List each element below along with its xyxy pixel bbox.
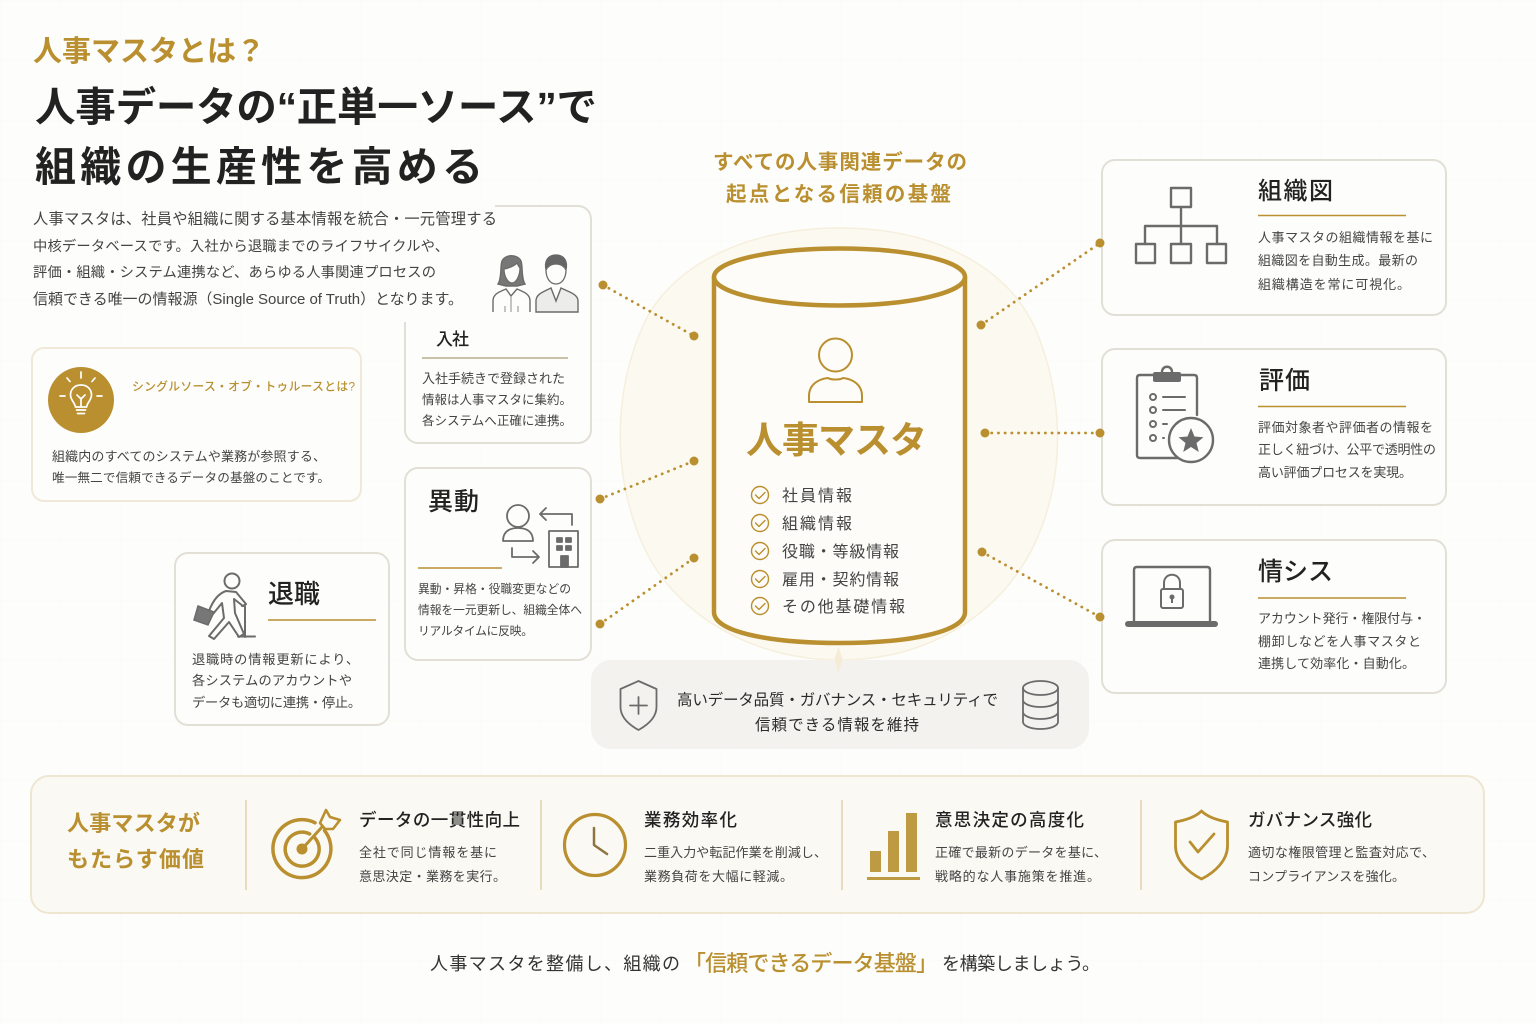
text: 情シス description: アカウント発行・権限付与・ [1258, 611, 1426, 626]
value: governance: コンプライアンスを強化。 [1248, 869, 1405, 884]
heading: 情シス: 情シス [1258, 558, 1333, 586]
text: callout: 組織内のすべてのシステムや業務が参照する、 [52, 449, 326, 464]
text: 退職 description [192, 652, 361, 710]
checklist: 雇用・契約情報 [782, 571, 899, 589]
text: 異動 description [418, 582, 582, 638]
checklist: その他基礎情報 [782, 598, 905, 616]
title eyebrow: 人事マスタとは？ [33, 35, 265, 68]
panel: value bar [31, 776, 1484, 913]
heading: center caption [713, 150, 967, 206]
checklist: 役職・等級情報 [782, 543, 899, 561]
intro text block: 中核データベースです。入社から退職までのライフサイクルや、 [33, 237, 449, 255]
checklist [752, 486, 905, 616]
text: banner: 信頼できる情報を維持 [755, 716, 919, 734]
footer message: を構築しましょう。 [942, 954, 1100, 974]
value: decision making: 意思決定の高度化 [935, 810, 1084, 830]
text: 情シス description: 連携して効率化・自動化。 [1258, 656, 1415, 671]
icon: shield plus [620, 681, 656, 730]
value: efficiency: 業務負荷を大幅に軽減。 [644, 869, 793, 884]
title: 組織の生産性を高める [35, 144, 483, 190]
footer message [430, 951, 1100, 976]
heading: 評価: 評価 [1259, 367, 1310, 395]
intro text block [33, 210, 497, 308]
text: 組織図 description: 人事マスタの組織情報を基に [1258, 230, 1433, 245]
footer message: 人事マスタを整備し、組織の [430, 954, 680, 974]
text: 退職 description: データも適切に連携・停止。 [192, 694, 361, 710]
intro text block: 信頼できる唯一の情報源（Single Source of Truth）となります。 [33, 291, 463, 308]
heading: callout: シングルソース・オブ・トゥルースとは? [132, 380, 355, 394]
value: decision making: 正確で最新のデータを基に、 [935, 845, 1107, 860]
value: governance [1176, 810, 1435, 884]
text: 入社 description: 各システムへ正確に連携。 [422, 413, 572, 428]
icon: two employees [493, 255, 578, 312]
value: governance: ガバナンス強化 [1248, 810, 1372, 830]
icon: shield check [1176, 811, 1228, 879]
panel: single source of truth callout [32, 348, 361, 501]
text: 組織図 description [1258, 230, 1433, 292]
value: decision making: 戦略的な人事施策を推進。 [935, 869, 1100, 884]
icon: org chart [1136, 188, 1226, 263]
center glow blob [620, 228, 1058, 660]
text: 情シス description: 棚卸しなどを人事マスタと [1258, 634, 1421, 649]
panel: 入社 card [395, 198, 591, 443]
heading: 入社: 入社 [436, 330, 469, 349]
text: 評価 description: 正しく紐づけ、公平で透明性の [1258, 442, 1436, 457]
text: 異動 description: 情報を一元更新し、組織全体へ [418, 603, 582, 617]
icon: clock [564, 814, 626, 876]
value: data consistency: 意思決定・業務を実行。 [359, 869, 506, 884]
heading: 退職: 退職 [268, 579, 320, 609]
text: 異動 description: リアルタイムに反映。 [418, 624, 533, 638]
text: 入社 description [422, 371, 572, 428]
text: 異動 description: 異動・昇格・役職変更などの [418, 582, 571, 596]
panel: data quality banner [591, 647, 1089, 749]
checklist: 社員情報 [782, 487, 852, 505]
text: 入社 description: 情報は人事マスタに集約。 [422, 392, 572, 407]
icon: transfer [503, 505, 578, 567]
panel: 組織図 card [1102, 160, 1446, 315]
icon: clipboard with star [1137, 367, 1213, 462]
value: data consistency: 全社で同じ情報を基に [359, 845, 497, 860]
intro text block: 評価・組織・システム連携など、あらゆる人事関連プロセスの [33, 264, 436, 281]
intro text block: 人事マスタは、社員や組織に関する基本情報を統合・一元管理する [33, 210, 497, 228]
icon: retiree with cane [194, 574, 255, 639]
icon: database [1023, 681, 1058, 729]
connectors [596, 238, 1104, 628]
heading: value bar: 人事マスタが [67, 811, 200, 836]
panel: 異動 card [405, 468, 591, 660]
cylinder: 人事マスタ database [714, 248, 965, 643]
text: 評価 description: 高い評価プロセスを実現。 [1258, 465, 1412, 480]
icon: bar chart [867, 813, 920, 880]
icon: light bulb badge [48, 367, 114, 433]
text: 退職 description: 各システムのアカウントや [192, 673, 352, 688]
value: efficiency: 業務効率化 [644, 810, 737, 830]
icon: laptop with lock [1125, 567, 1218, 627]
panel: 退職 card [175, 553, 389, 725]
text: banner [677, 690, 998, 734]
heading: center caption: 起点となる信頼の基盤 [726, 183, 951, 206]
panel: 情シス card [1102, 540, 1446, 693]
heading: value bar [67, 811, 204, 872]
title: 人事データの“正単一ソース”で [35, 84, 597, 130]
checklist: 組織情報 [782, 515, 852, 533]
text: 入社 description: 入社手続きで登録された [422, 371, 565, 386]
text: 退職 description: 退職時の情報更新により、 [192, 652, 359, 667]
heading: 組織図: 組織図 [1258, 178, 1333, 205]
heading: center caption: すべての人事関連データの [713, 150, 967, 174]
value: governance: 適切な権限管理と監査対応で、 [1248, 845, 1435, 860]
text: 組織図 description: 組織図を自動生成。最新の [1258, 253, 1418, 268]
text: 評価 description [1258, 420, 1436, 480]
heading: 異動: 異動 [428, 488, 479, 516]
title [35, 84, 597, 190]
value: data consistency: データの一貫性向上 [359, 810, 520, 830]
text: 評価 description: 評価対象者や評価者の情報を [1258, 420, 1433, 435]
text: callout: 唯一無二で信頼できるデータの基盤のことです。 [52, 470, 330, 485]
value: data consistency [273, 810, 520, 884]
heading: 人事マスタ: 人事マスタ [746, 420, 927, 461]
icon: target [273, 810, 340, 878]
text: 組織図 description: 組織構造を常に可視化。 [1258, 277, 1410, 292]
text: banner: 高いデータ品質・ガバナンス・セキュリティで [677, 690, 998, 709]
value: efficiency [564, 810, 827, 884]
value: efficiency: 二重入力や転記作業を削減し、 [644, 845, 827, 860]
panel: 評価 card [1102, 349, 1446, 505]
footer message: 「信頼できるデータ基盤」 [684, 951, 938, 976]
heading: value bar: もたらす価値 [67, 847, 204, 872]
value: decision making [867, 810, 1107, 884]
icon: person [809, 338, 862, 402]
text: 情シス description [1258, 611, 1426, 671]
text: callout [52, 449, 330, 485]
